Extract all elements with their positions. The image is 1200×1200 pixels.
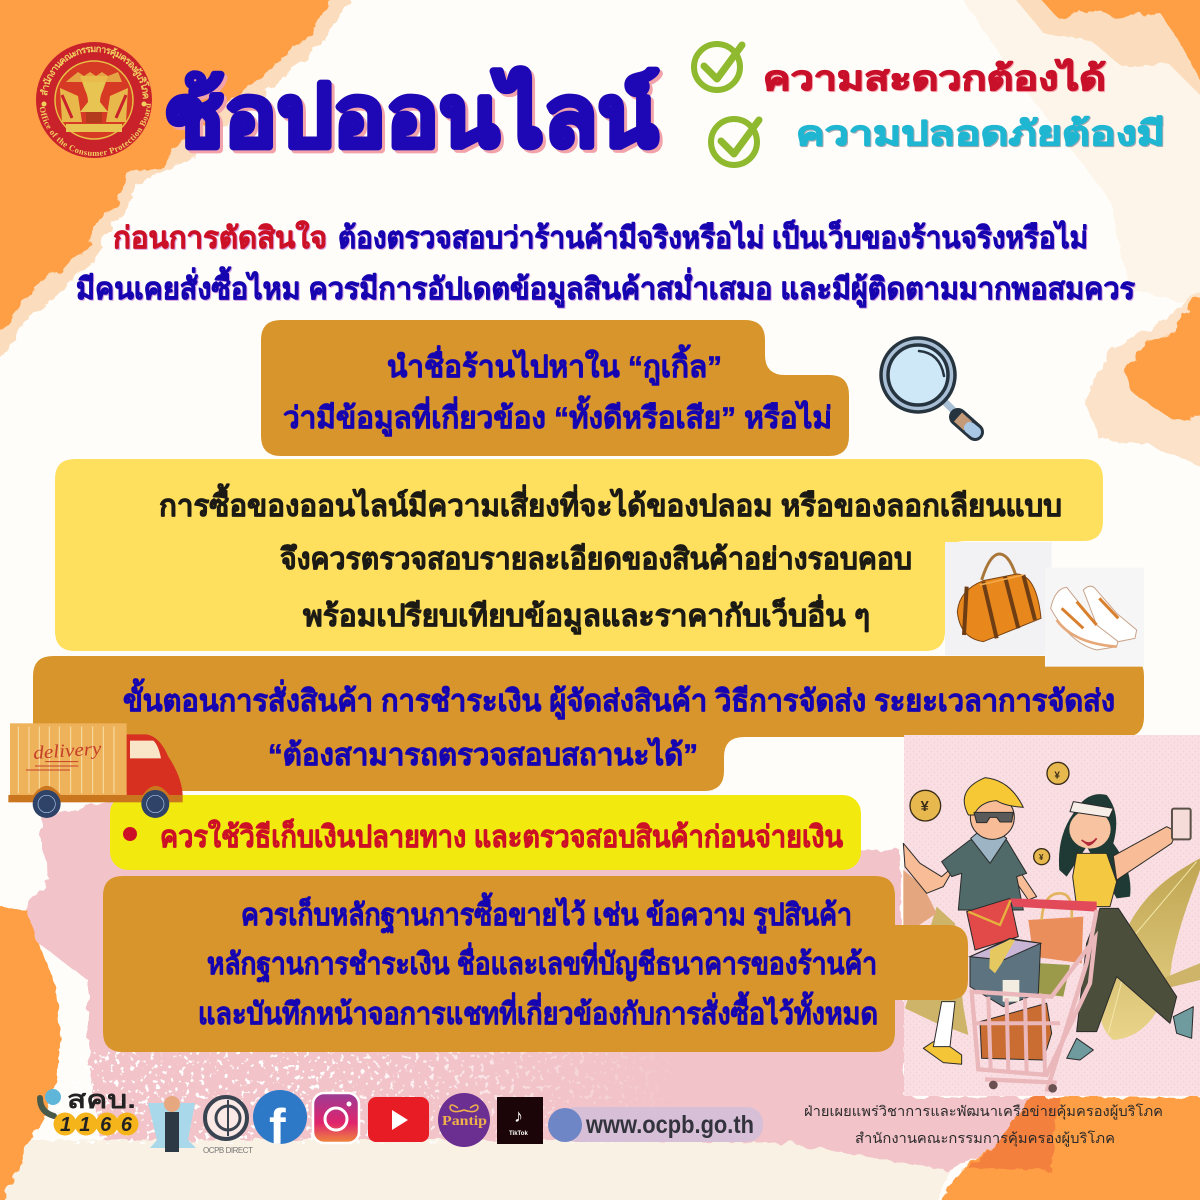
footer: facebook: f [269, 1099, 286, 1155]
illustration: cart with boxes [970, 910, 1097, 1093]
footer: mascot [148, 1096, 196, 1152]
slogan: safety: ความปลอดภัยต้องมี [796, 115, 1165, 153]
panel: cash on delivery [110, 795, 861, 870]
bags [967, 893, 1097, 963]
panel: cash on delivery: ควรใช้วิธีเก็บเงินปลายทาง และตรวจสอบสินค้าก่อนจ่ายเงิน [160, 818, 843, 854]
footer: facebook [253, 1090, 307, 1155]
woman [1059, 794, 1193, 1060]
panel: search on Google [261, 320, 849, 456]
panel: keep evidence: ควรเก็บหลักฐานการซื้อขายไว้ เช่น ข้อความ รูปสินค้า [241, 892, 852, 935]
panel: order process [33, 656, 1144, 791]
intro text: ก่อนการตัดสินใจ [113, 220, 327, 255]
panel: counterfeit warning: การซื้อของออนไลน์มีความเสี่ยงที่จะได้ของปลอม หรือของลอกเลียนแบบ [159, 483, 1062, 523]
intro text [76, 219, 1135, 308]
footer: credit text: สำนักงานคณะกรรมการคุ้มครองผู้บริโภค [855, 1130, 1115, 1147]
illustration: shoppers with cart [903, 735, 1200, 1096]
footer: pantip [438, 1093, 490, 1147]
panel: keep evidence: หลักฐานการชำระเงิน ชื่อและเลขที่บัญชีธนาคารของร้านค้า [207, 942, 877, 984]
panel: search on Google: ว่ามีข้อมูลที่เกี่ยวข้อง “ทั้งดีหรือเสีย” หรือไม่ [283, 395, 832, 437]
coins [910, 762, 1069, 865]
footer: pantip: Pantip [442, 1114, 487, 1129]
intro text: มีคนเคยสั่งซื้อไหม ควรมีการอัปเดตข้อมูลสินค้าสม่ำเสมอ และมีผู้ติดตามมากพอสมควร [76, 266, 1135, 308]
heading: title: ช้อปออนไลน์ [164, 67, 658, 165]
man [903, 778, 1037, 1064]
panel: counterfeit warning: พร้อมเปรียบเทียบข้อมูลและราคากับเว็บอื่น ๆ [303, 594, 870, 635]
footer: instagram [313, 1093, 359, 1143]
panel: keep evidence: และบันทึกหน้าจอการแชทที่เกี่ยวข้องกับการสั่งซื้อไว้ทั้งหมด [198, 991, 878, 1031]
footer: credit text: ฝ่ายเผยแพร่วิชาการและพัฒนาเครือข่ายคุ้มครองผู้บริโภค [804, 1103, 1163, 1120]
footer: hotline 1166 [40, 1086, 138, 1136]
footer: tiktok [497, 1097, 543, 1144]
heading: logo: สำนักงานคณะกรรมการคุ้มครองผู้บริโภค [40, 46, 150, 99]
panel: counterfeit warning: จึงควรตรวจสอบรายละเอียดของสินค้าอย่างรอบคอบ [280, 543, 912, 576]
image: sneakers [1045, 568, 1144, 667]
footer: credit text [804, 1103, 1163, 1147]
heading: logo [36, 42, 152, 158]
footer: OCPB direct logo: OCPB DIRECT [203, 1146, 253, 1155]
footer: website [548, 1107, 763, 1142]
panel: order process: “ต้องสามารถตรวจสอบสถานะได้” [268, 737, 698, 772]
intro text: ต้องตรวจสอบว่าร้านค้ามีจริงหรือไม่ เป็นเว็บของร้านจริงหรือไม่ [338, 219, 1088, 255]
footer: tiktok: ♪ [514, 1106, 523, 1126]
slogan: convenience: ความสะดวกต้องได้ [763, 58, 1106, 98]
coins: ¥ [1039, 853, 1044, 862]
panel: search on Google: นำชื่อร้านไปหาใน “กูเกิ้ล” [387, 344, 722, 386]
footer: tiktok: TikTok [509, 1131, 528, 1137]
icon: delivery truck: delivery [33, 738, 103, 764]
panel: counterfeit warning [55, 459, 1103, 651]
leaves [905, 858, 1200, 1040]
panel: keep evidence [103, 876, 968, 1052]
footer: OCPB direct logo [203, 1097, 253, 1155]
heading: logo: Office of the Consumer Protection Board [40, 104, 151, 156]
coins: ¥ [921, 799, 930, 815]
icon: magnifier [881, 338, 975, 432]
footer: hotline 1166: 1166 [60, 1114, 133, 1136]
icon: check 1 [694, 44, 742, 90]
panel: order process: ขั้นตอนการสั่งสินค้า การชำระเงิน ผู้จัดส่งสินค้า วิธีการจัดส่ง ระยะเวลาการจัดส่ง [123, 678, 1115, 720]
footer: youtube [368, 1097, 429, 1142]
footer: website: www.ocpb.go.th [585, 1111, 754, 1139]
image: bag [945, 542, 1052, 655]
coins: ¥ [1054, 770, 1060, 781]
footer: hotline 1166: สคบ. [67, 1086, 136, 1114]
icon: delivery truck [8, 723, 183, 818]
icon: check 2 [711, 119, 759, 165]
